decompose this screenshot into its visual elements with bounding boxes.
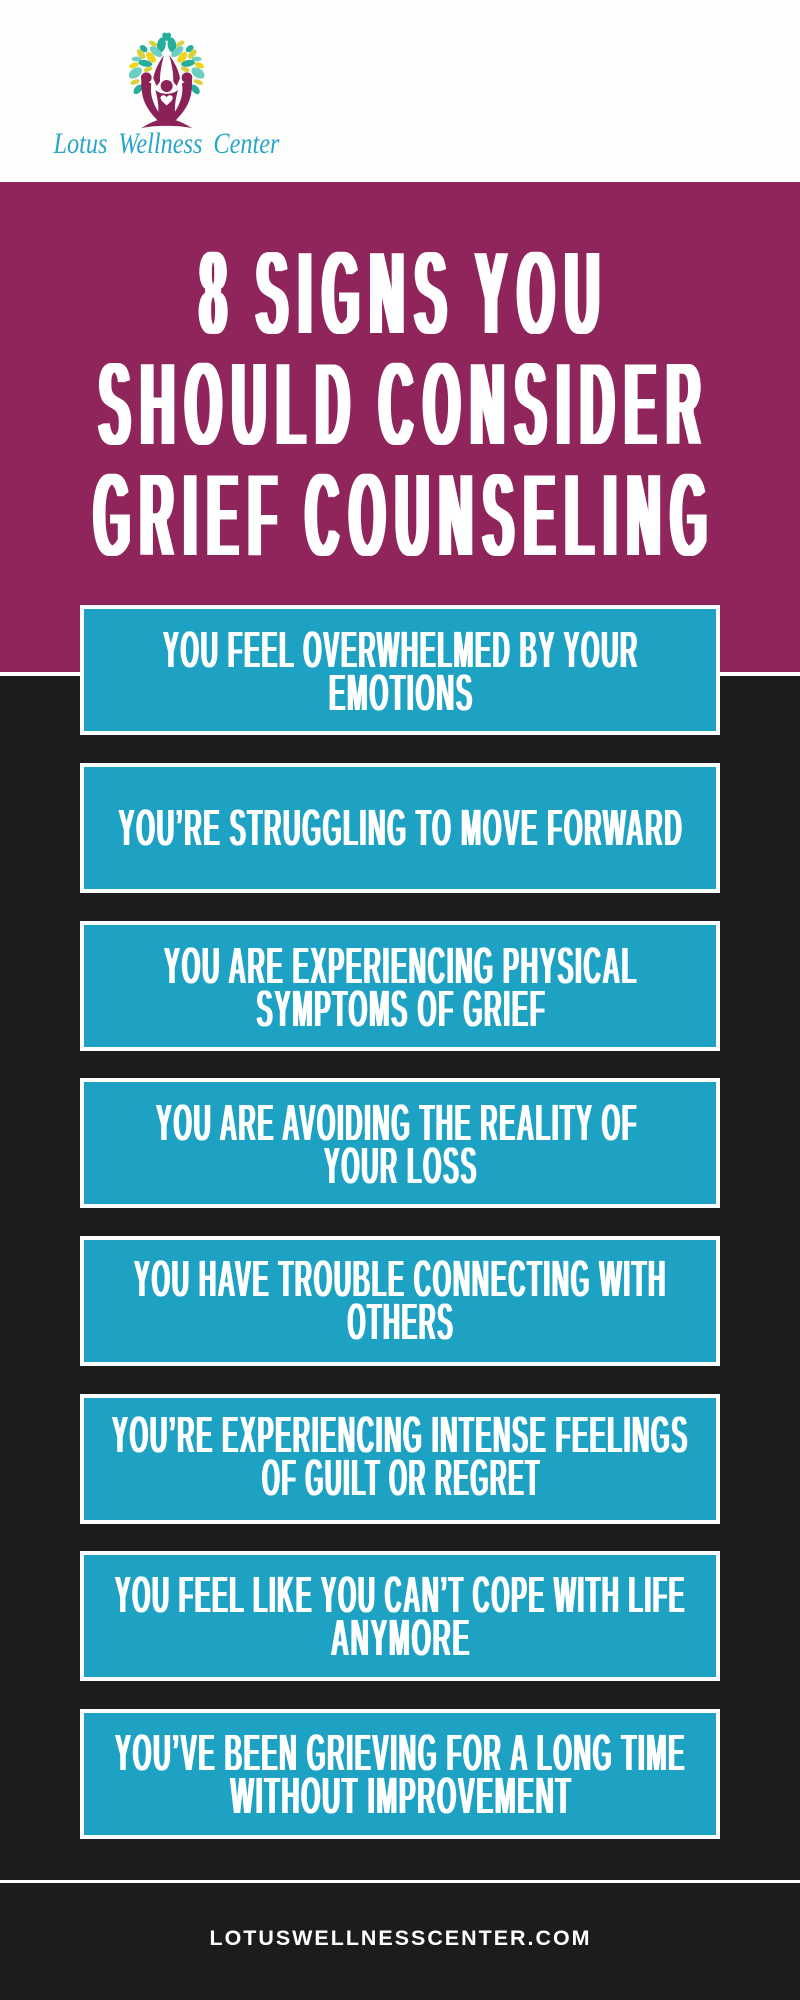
sign 4 text [156, 1093, 638, 1196]
sign 5 text: OTHERS [348, 1292, 454, 1352]
sign 7 text [115, 1565, 686, 1668]
panel: sign 1 [82, 607, 718, 733]
sign 7 text: ANYMORE [331, 1608, 471, 1668]
sign 5 text [134, 1249, 667, 1352]
panel: sign 3 [82, 923, 718, 1049]
sign 8 text [115, 1723, 686, 1826]
sign 4 text: YOUR LOSS [324, 1136, 478, 1196]
divider band under title [0, 672, 800, 676]
title [94, 225, 717, 583]
footer divider [0, 1880, 800, 1883]
icon: tree of people [127, 33, 207, 128]
logo: Lotus Wellness Center [53, 33, 280, 160]
sign 3 text [164, 936, 638, 1039]
panel: sign 7 [82, 1553, 718, 1679]
sign 1 text: EMOTIONS [329, 663, 474, 723]
logo wordmark: Lotus Wellness Center [53, 127, 280, 160]
header band [0, 0, 800, 182]
panel: sign 8 [82, 1711, 718, 1837]
panel: sign 5 [82, 1238, 718, 1364]
footer website: LOTUSWELLNESSCENTER.COM [210, 1926, 592, 1950]
title panel background [0, 182, 800, 672]
panel: sign 2 [82, 765, 718, 891]
panel: sign 4 [82, 1080, 718, 1206]
panel: sign 6 [82, 1396, 718, 1522]
sign 1 text [163, 620, 639, 723]
sign 6 text [112, 1405, 689, 1508]
